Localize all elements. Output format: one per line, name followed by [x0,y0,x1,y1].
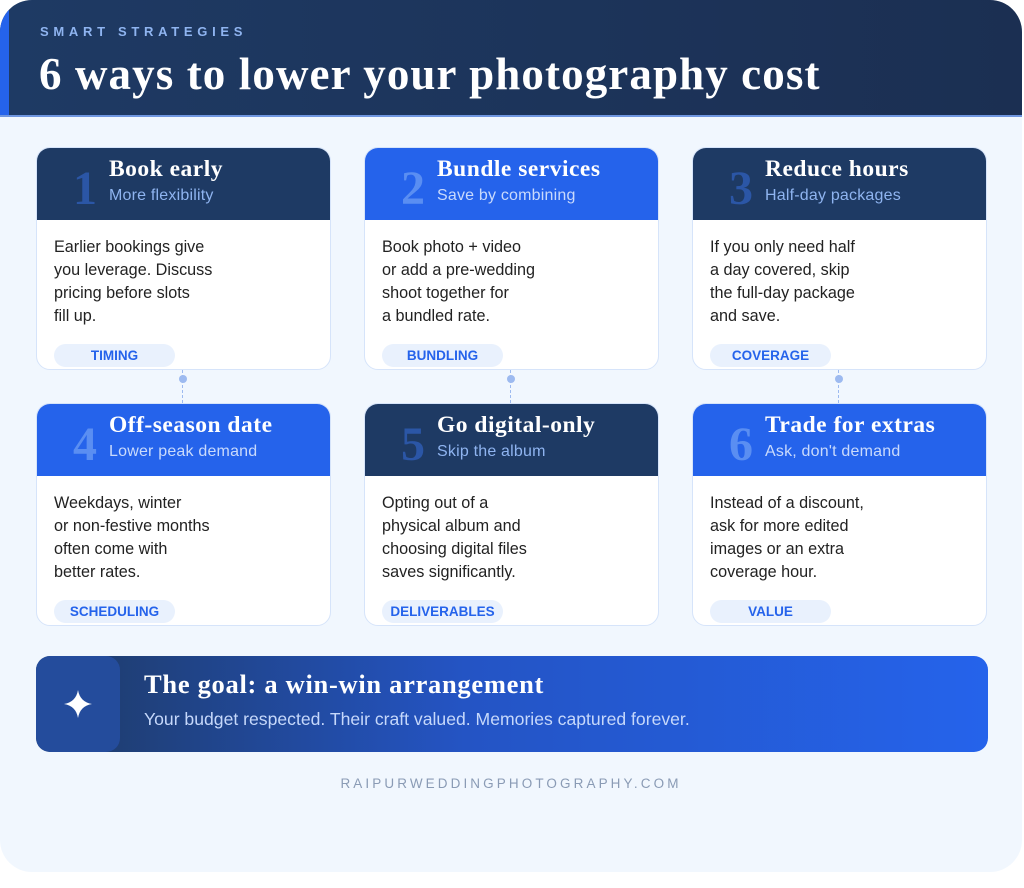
card 5: physical album and [382,517,521,535]
card 1: you leverage. Discuss [54,261,212,279]
card 2: shoot together for [382,284,509,302]
card 5: DELIVERABLES [390,604,495,619]
card 5: 5 [401,418,425,471]
card 6 [692,403,987,626]
connector 2-5 [507,370,515,403]
card 4: SCHEDULING [70,604,159,619]
card 1: fill up. [54,307,96,325]
card 3: If you only need half [710,238,855,256]
card 1: 1 [73,162,97,215]
card 1: Earlier bookings give [54,238,204,256]
card 4: Off-season date [109,412,272,438]
card 5: choosing digital files [382,540,527,558]
card 2 [364,147,659,370]
icon: sparkle [36,656,120,752]
card 3: Reduce hours [765,156,909,182]
card 3: COVERAGE [732,348,809,363]
card 6: Instead of a discount, [710,494,864,512]
card 3: 3 [729,162,753,215]
card 2: Save by combining [437,187,576,204]
card 6: Ask, don't demand [765,443,900,460]
card 6: ask for more edited [710,517,849,535]
card 2: BUNDLING [407,348,478,363]
footer: RAIPURWEDDINGPHOTOGRAPHY.COM [340,776,682,791]
card 2: Bundle services [437,156,601,182]
card 6: 6 [729,418,753,471]
card 4: Lower peak demand [109,443,257,460]
card 4: 4 [73,418,97,471]
connector 3-6 [835,370,843,403]
card 4: Weekdays, winter [54,494,181,512]
card 4 [36,403,331,626]
card 5: Skip the album [437,443,546,460]
card 3: Half-day packages [765,187,901,204]
banner subtitle: Your budget respected. Their craft valued. Memories captured forever. [144,709,690,729]
card 3 [692,147,987,370]
banner: goal [36,656,988,752]
card 5: Opting out of a [382,494,488,512]
card 2: or add a pre-wedding [382,261,535,279]
card 2: Book photo + video [382,238,521,256]
card 1 [36,147,331,370]
card 3: the full-day package [710,284,855,302]
card 4: or non-festive months [54,517,210,535]
card 3: and save. [710,307,780,325]
card 4: better rates. [54,563,140,581]
card 6: coverage hour. [710,563,817,581]
card 1: TIMING [91,348,138,363]
connector 1-4 [179,370,187,403]
card 1: pricing before slots [54,284,190,302]
card 2: a bundled rate. [382,307,490,325]
card 6: Trade for extras [765,412,935,438]
card 1: Book early [109,156,223,182]
kicker: SMART STRATEGIES [40,24,247,39]
card 2: 2 [401,162,425,215]
header [0,0,1022,117]
card 3: a day covered, skip [710,261,849,279]
card 6: images or an extra [710,540,844,558]
card 1: More flexibility [109,187,214,204]
card 4: often come with [54,540,167,558]
card 5 [364,403,659,626]
card 5: Go digital-only [437,412,595,438]
title: 6 ways to lower your photography cost [39,49,821,99]
card 5: saves significantly. [382,563,516,581]
card 6: VALUE [748,604,793,619]
banner title: The goal: a win-win arrangement [144,669,544,699]
